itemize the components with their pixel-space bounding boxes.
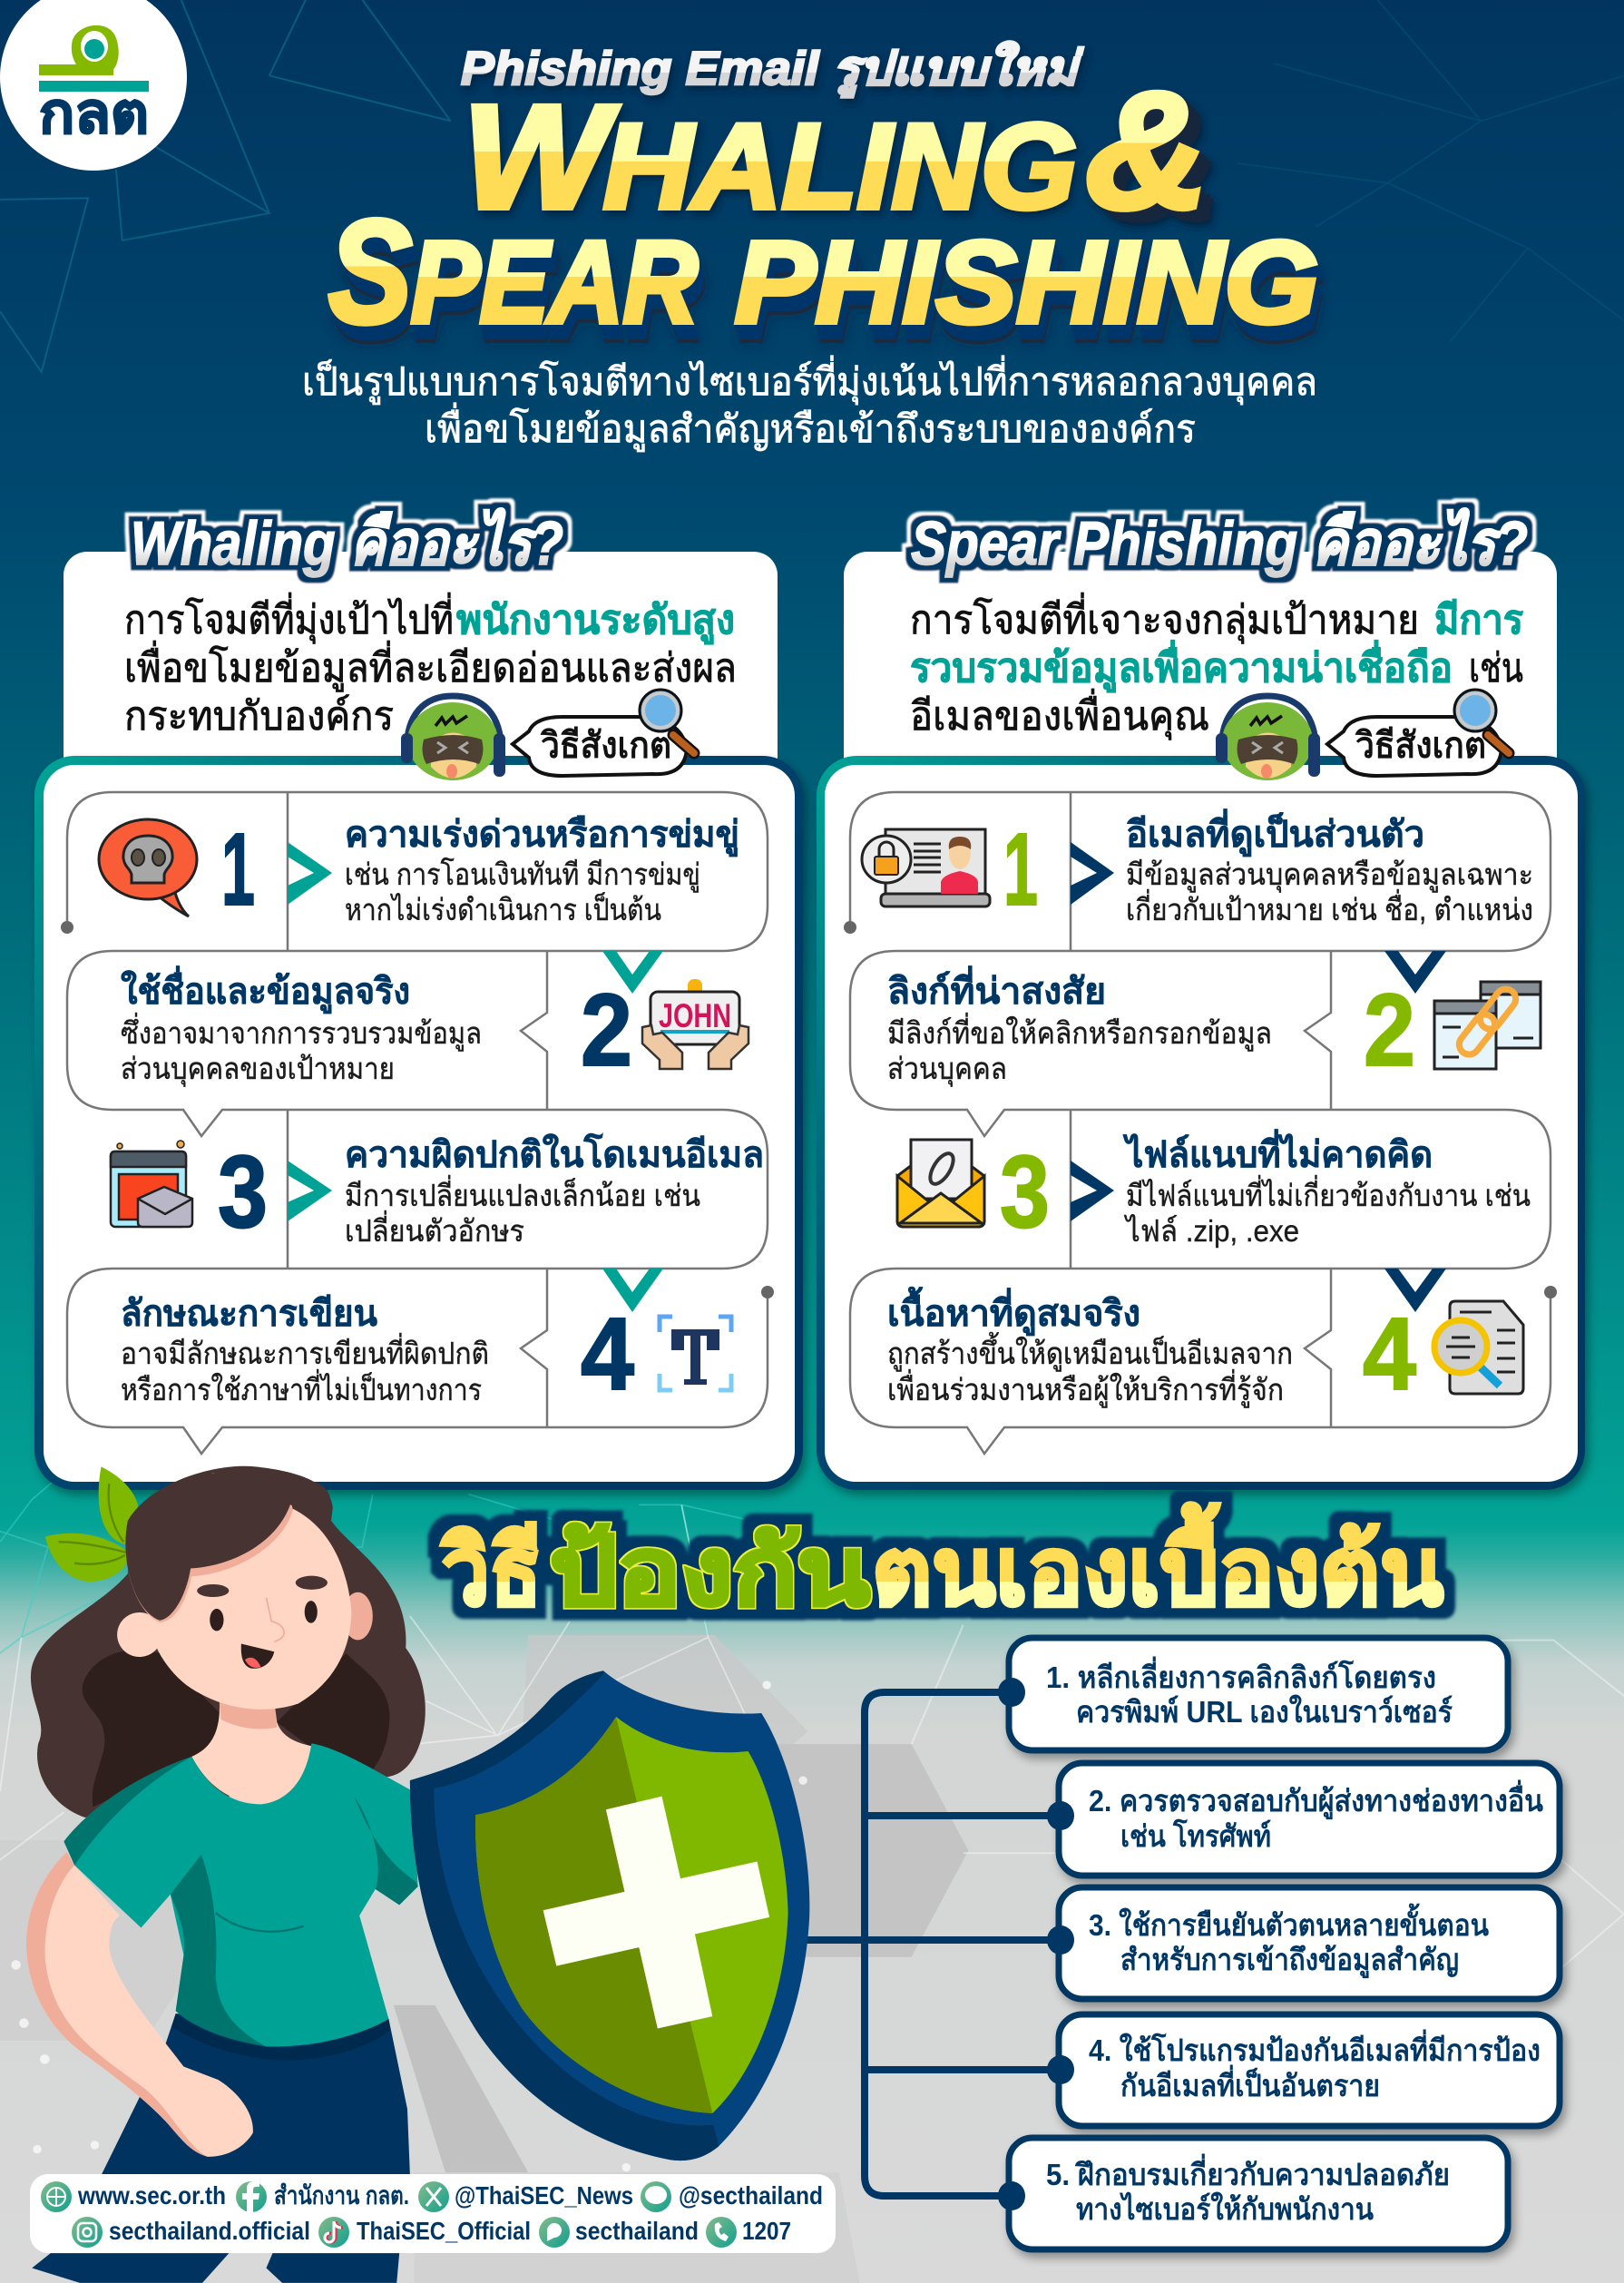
- item 4: หรือการใช้ภาษาที่ไม่เป็นทางการ: [121, 1369, 482, 1406]
- item 4: [121, 1294, 731, 1411]
- cross: [543, 1797, 769, 2029]
- icon: envelope with paper clip: [897, 1140, 984, 1227]
- item 4: [887, 1287, 1523, 1411]
- heading: protection: วิธี: [441, 1520, 542, 1625]
- callout bubble: วิธีสังเกต: [1355, 726, 1486, 766]
- tip 3: สำหรับการเข้าถึงข้อมูลสำคัญ: [1120, 1943, 1459, 1979]
- item 3: 3: [218, 1134, 268, 1249]
- callout bubble: วิธีสังเกต: [540, 726, 671, 766]
- definition text: การโจมตีที่เจาะจงกลุ่มเป้าหมาย: [910, 592, 1419, 644]
- item 1: เกี่ยวกับเป้าหมาย เช่น ชื่อ, ตำแหน่ง: [1126, 889, 1533, 926]
- heading: protection: [441, 1503, 1443, 1625]
- logo: [0, 0, 187, 171]
- tip 1: [998, 1638, 1508, 1750]
- tip 1: ควรพิมพ์ URL เองในเบราว์เซอร์: [1076, 1694, 1453, 1729]
- connector lines: [806, 1678, 1074, 2210]
- neck: [191, 1701, 311, 1804]
- definition text: เช่น: [1469, 646, 1523, 691]
- contact: facebook: [236, 2181, 409, 2212]
- heading: protection: ป้องกัน: [550, 1520, 870, 1625]
- title line 1: HALING: [603, 100, 1077, 234]
- title line 2: PHISHING: [735, 218, 1318, 348]
- item 1: อีเมลที่ดูเป็นส่วนตัว: [1126, 808, 1424, 857]
- contact: tiktok: ThaiSEC_Official: [357, 2217, 531, 2245]
- item 3: [897, 1129, 1531, 1249]
- item 2: [887, 965, 1541, 1087]
- contact: line: @secthailand: [679, 2181, 823, 2210]
- item 4: ถูกสร้างขึ้นให้ดูเหมือนเป็นอีเมลจาก: [887, 1332, 1293, 1372]
- tip 3: 3. ใช้การยืนยันตัวตนหลายขั้นตอน: [1089, 1903, 1489, 1942]
- tip 2: 2. ควรตรวจสอบกับผู้ส่งทางช่องทางอื่น: [1089, 1779, 1543, 1820]
- tip 5: 5. ฝึกอบรมเกี่ยวกับความปลอดภัย: [1046, 2153, 1450, 2191]
- chevrons: [1071, 842, 1446, 1312]
- arm: [26, 1852, 253, 2157]
- icon: name badge: JOHN: [659, 997, 731, 1034]
- leaves: [45, 1466, 139, 1582]
- item 2: มีลิงก์ที่ขอให้คลิกหรือกรอกข้อมูล: [887, 1013, 1272, 1052]
- background network lines: [0, 0, 1624, 372]
- icon: name badge: [642, 979, 748, 1069]
- item 3: ไฟล์ .zip, .exe: [1123, 1214, 1299, 1248]
- pants: [32, 2014, 410, 2283]
- item 1: มีข้อมูลส่วนบุคคลหรือข้อมูลเฉพาะ: [1126, 857, 1533, 893]
- subtitle: เพื่อขโมยข้อมูลสำคัญหรือเข้าถึงระบบขององค์กร: [425, 403, 1196, 452]
- contact: x: [418, 2181, 633, 2212]
- tip 1: 1. หลีกเลี่ยงการคลิกลิงก์โดยตรง: [1046, 1656, 1436, 1694]
- item 3: เปลี่ยนตัวอักษร: [345, 1210, 524, 1248]
- tip 3: [1047, 1887, 1560, 1999]
- icon: document magnifier: [1434, 1301, 1523, 1394]
- item 4: เนื้อหาที่ดูสมจริง: [887, 1287, 1140, 1336]
- item 2: ใช้ชื่อและข้อมูลจริง: [121, 965, 410, 1014]
- icon: laptop with person: [862, 829, 990, 906]
- heading: spear phishing: Spear Phishing คืออะไร?: [911, 507, 1528, 578]
- item 3: 3: [1000, 1134, 1050, 1249]
- contact: lemon8: [539, 2217, 699, 2248]
- icon: text frame: [660, 1317, 731, 1390]
- contact: instagram: [72, 2217, 310, 2248]
- shirt: [64, 1743, 418, 2047]
- heading: whaling: Whaling คืออะไร?: [131, 507, 563, 578]
- subtitle: [302, 356, 1317, 452]
- definition text: [124, 592, 737, 739]
- title kicker: Phishing Email รูปแบบใหม่: [461, 41, 1083, 98]
- definition text: กระทบกับองค์กร: [124, 694, 394, 739]
- definition text: พนักงานระดับสูง: [456, 598, 735, 644]
- item 2: ส่วนบุคคล: [887, 1052, 1007, 1087]
- background hexagons: [0, 1625, 1624, 2283]
- item 1: เช่น การโอนเงินทันที มีการข่มขู่: [345, 857, 700, 893]
- tip 5: [998, 2138, 1508, 2249]
- card: whaling signs: [34, 756, 803, 1490]
- item 2: 2: [581, 973, 632, 1087]
- item 2: [121, 965, 748, 1087]
- title line 1: [463, 56, 1208, 243]
- hair: [31, 1466, 426, 1818]
- mascot with callout: spear phishing: [1216, 690, 1509, 780]
- shield: [410, 1671, 809, 2161]
- item 3: ไฟล์แนบที่ไม่คาดคิด: [1122, 1129, 1433, 1175]
- title line 2: PEAR: [411, 218, 698, 348]
- tip 4: กันอีเมลที่เป็นอันตราย: [1120, 2064, 1380, 2102]
- bubble outlines: [844, 792, 1557, 1454]
- contact: phone: 1207: [742, 2217, 791, 2245]
- title line 1: W: [463, 73, 620, 240]
- panel: spear phishing definition: [844, 552, 1557, 797]
- item 1: 1: [221, 812, 255, 926]
- tip 4: 4. ใช้โปรแกรมป้องกันอีเมลที่มีการป้อง: [1089, 2029, 1541, 2067]
- heading: protection: ตนเองเบื้องต้น: [872, 1503, 1443, 1625]
- logo mark: [39, 25, 149, 92]
- item 1: ความเร่งด่วนหรือการข่มขู่: [345, 815, 739, 857]
- callout bubble: [513, 690, 694, 776]
- bubble outlines: [61, 792, 774, 1454]
- illustration: woman with shield: [26, 1466, 809, 2283]
- item 1: [99, 812, 739, 926]
- title line 1: &: [1085, 56, 1208, 243]
- contact: website: [41, 2181, 226, 2212]
- item 4: อาจมีลักษณะการเขียนที่ผิดปกติ: [121, 1333, 489, 1370]
- contact: instagram: secthailand.official: [109, 2217, 310, 2245]
- item 1: 1: [1003, 812, 1038, 926]
- icon: linked windows: [1434, 982, 1541, 1069]
- definition text: รวบรวมข้อมูลเพื่อความน่าเชื่อถือ: [910, 640, 1453, 692]
- subtitle: เป็นรูปแบบการโจมตีทางไซเบอร์ที่มุ่งเน้นไปที่การหลอกลวงบุคคล: [302, 356, 1317, 406]
- callout bubble: [1327, 690, 1509, 776]
- item 3: มีไฟล์แนบที่ไม่เกี่ยวข้องกับงาน เช่น: [1126, 1175, 1531, 1212]
- item 4: 4: [1363, 1297, 1416, 1411]
- item 4: ลักษณะการเขียน: [121, 1294, 377, 1334]
- item 1: หากไม่เร่งดำเนินการ เป็นต้น: [345, 892, 661, 926]
- definition text: การโจมตีที่มุ่งเป้าไปที่: [124, 592, 454, 644]
- title line 2: [328, 190, 1318, 354]
- item 4: เพื่อนร่วมงานหรือผู้ให้บริการที่รู้จัก: [887, 1369, 1284, 1408]
- icon: skull bubble: [99, 819, 197, 916]
- item 2: ส่วนบุคคลของเป้าหมาย: [121, 1052, 395, 1087]
- item 4: 4: [581, 1297, 634, 1411]
- face: [149, 1507, 351, 1710]
- item 3: [111, 1133, 764, 1249]
- contact: line: [641, 2181, 823, 2212]
- item 1: [862, 808, 1533, 926]
- ears: [117, 1592, 373, 1657]
- item 3: ความผิดปกติในโดเมนอีเมล: [345, 1133, 764, 1175]
- title line 2: S: [328, 190, 412, 354]
- item 2: ซึ่งอาจมาจากการรวบรวมข้อมูล: [121, 1013, 482, 1052]
- tip 2: เช่น โทรศัพท์: [1120, 1818, 1271, 1853]
- lower network and dots: [0, 1468, 807, 2171]
- contact: facebook: สำนักงาน กลต.: [274, 2181, 409, 2210]
- contact: lemon8: secthailand: [575, 2217, 699, 2245]
- icon: browser and envelope: [111, 1141, 192, 1227]
- item 2: 2: [1364, 973, 1415, 1087]
- item 2: ลิงก์ที่น่าสงสัย: [887, 965, 1106, 1012]
- card: spear phishing signs: [817, 756, 1585, 1490]
- definition text: อีเมลของเพื่อนคุณ: [910, 688, 1209, 740]
- mascot with callout: whaling: [401, 690, 694, 780]
- definition text: [910, 592, 1523, 740]
- footer contact bar: [30, 2174, 836, 2253]
- fringe: [125, 1471, 331, 1622]
- item 3: มีการเปลี่ยนแปลงเล็กน้อย เช่น: [345, 1175, 700, 1212]
- definition text: เพื่อขโมยข้อมูลที่ละเอียดอ่อนและส่งผล: [124, 640, 737, 692]
- chevrons: [288, 842, 663, 1312]
- tip 2: [1047, 1763, 1560, 1876]
- contact: x: @ThaiSEC_News: [455, 2181, 633, 2210]
- tip 5: ทางไซเบอร์ให้กับพนักงาน: [1076, 2191, 1374, 2226]
- tip 4: [1047, 2014, 1560, 2126]
- face details: [197, 1576, 328, 1669]
- logo text: กลต: [39, 83, 149, 145]
- contact: website: www.sec.or.th: [77, 2181, 226, 2210]
- panel: whaling definition: [64, 552, 778, 797]
- contact: phone: [706, 2217, 791, 2248]
- contact: tiktok: [318, 2217, 531, 2248]
- definition text: มีการ: [1434, 598, 1523, 642]
